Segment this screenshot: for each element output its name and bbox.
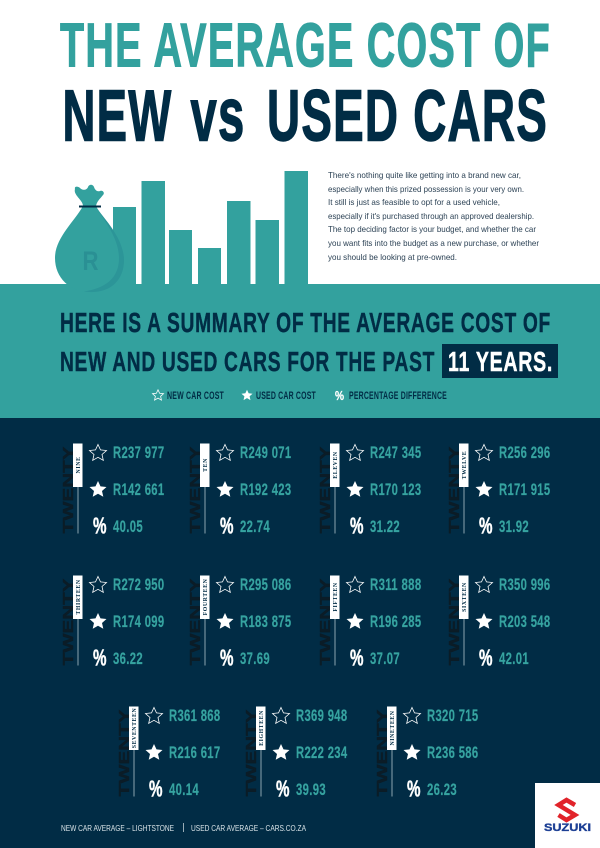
card: 2019: R320 715 (427, 707, 478, 725)
card: 2015: R311 888 (370, 576, 422, 594)
card: 2019: TWENTY (374, 710, 391, 796)
card: 2011 (317, 444, 422, 538)
legend: NEW CAR COST (167, 390, 224, 402)
card: 2018: % (276, 776, 290, 802)
card: 2012: R171 915 (499, 481, 550, 499)
card: 2016: SIXTEEN (462, 582, 468, 612)
logo: Suzuki (535, 783, 600, 848)
card: 2009: % (93, 512, 106, 538)
intro text: you want fits into the budget as a new purchase, or whether (328, 239, 539, 248)
summary heading: NEW AND USED CARS FOR THE PAST (60, 346, 435, 377)
card: 2019: NINETEEN (390, 710, 396, 746)
card: 2015: % (350, 644, 364, 670)
intro text: There's nothing quite like getting into a brand new car, (328, 171, 521, 180)
title: vs (190, 72, 246, 156)
card: 2012 (446, 444, 550, 538)
card: 2017: SEVENTEEN (132, 708, 138, 748)
card: 2018: EIGHTEEN (259, 710, 265, 746)
card: 2009: 40.05 (113, 518, 143, 536)
summary heading: 11 YEARS. (448, 346, 553, 377)
logo: Suzuki: SUZUKI (544, 822, 591, 834)
card: 2011: TWENTY (317, 446, 334, 534)
card: 2014: R295 086 (240, 576, 292, 594)
card: 2013: % (93, 644, 106, 670)
panel: teal band (0, 284, 600, 418)
card: 2013: 36.22 (113, 650, 143, 668)
summary heading (60, 307, 558, 378)
bar chart (113, 171, 308, 285)
card: 2016: 42.01 (499, 650, 529, 668)
card: 2019: R236 586 (427, 744, 478, 762)
card: 2015 (317, 576, 422, 670)
footer sources: NEW CAR AVERAGE – LIGHTSTONE (61, 823, 174, 833)
card: 2013: THIRTEEN (76, 579, 82, 615)
card: 2016: R350 996 (499, 576, 550, 594)
card: 2010: 22.74 (240, 518, 270, 536)
card: 2010: R249 071 (240, 444, 292, 462)
card: 2011: R247 345 (370, 444, 422, 462)
card: 2018: R369 948 (296, 707, 348, 725)
card: 2015: 37.07 (370, 650, 400, 668)
legend: PERCENTAGE DIFFERENCE (349, 390, 447, 402)
card: 2014 (187, 576, 292, 670)
card: 2011: 31.22 (370, 518, 400, 536)
card: 2017: TWENTY (116, 710, 133, 796)
legend: USED CAR COST (256, 390, 316, 402)
card: 2011: % (350, 512, 364, 538)
card: 2017: R361 868 (169, 707, 220, 725)
footer sources: USED CAR AVERAGE – CARS.CO.ZA (191, 823, 306, 833)
card: 2010 (187, 444, 292, 538)
card: 2016: % (479, 644, 492, 670)
card: 2012: R256 296 (499, 444, 550, 462)
card: 2010: TEN (203, 458, 209, 472)
card: 2019: % (407, 776, 420, 802)
card: 2010: TWENTY (187, 446, 204, 534)
intro text (328, 171, 539, 262)
card: 2011: ELEVEN (333, 451, 339, 479)
card: 2012: TWELVE (462, 451, 468, 479)
icon: money bag (55, 185, 124, 292)
card: 2017 (116, 706, 220, 802)
intro text: The top deciding factor is your budget, and whether the car (328, 225, 536, 234)
icon: money bag: R (82, 246, 98, 276)
legend (152, 388, 447, 403)
card: 2009: TWENTY (60, 446, 77, 534)
card: 2009: R237 977 (113, 444, 164, 462)
card: 2018: 39.93 (296, 781, 326, 799)
card: 2016 (446, 576, 550, 670)
title: NEW (62, 76, 172, 156)
legend: % (335, 388, 344, 403)
card: 2014: % (220, 644, 234, 670)
panel: navy data area (0, 418, 600, 848)
title (60, 12, 551, 156)
card: 2016: R203 548 (499, 613, 550, 631)
card: 2014: TWENTY (187, 578, 204, 666)
card: 2013: TWENTY (60, 578, 77, 666)
intro text: especially if it's purchased through an approved dealership. (328, 212, 534, 221)
card: 2014: FOURTEEN (203, 578, 209, 615)
card: 2009: NINE (76, 457, 82, 473)
intro text: you should be looking at pre-owned. (328, 253, 457, 262)
card: 2013 (60, 576, 164, 670)
card: 2016: TWENTY (446, 578, 463, 666)
card: 2017: % (149, 776, 162, 802)
card: 2013: R272 950 (113, 576, 164, 594)
card: 2014: R183 875 (240, 613, 292, 631)
card: 2018: TWENTY (243, 710, 260, 796)
card: 2015: FIFTEEN (333, 582, 339, 612)
card: 2018: R222 234 (296, 744, 348, 762)
card: 2011: R170 123 (370, 481, 422, 499)
card: 2015: TWENTY (317, 578, 334, 666)
card: 2009: R142 661 (113, 481, 164, 499)
card: 2009 (60, 444, 164, 538)
card: 2017: 40.14 (169, 781, 199, 799)
card: 2014: 37.69 (240, 650, 270, 668)
card: 2017: R216 617 (169, 744, 220, 762)
card: 2018 (243, 706, 348, 802)
card: 2013: R174 099 (113, 613, 164, 631)
card: 2012: TWENTY (446, 446, 463, 534)
card: 2010: R192 423 (240, 481, 292, 499)
card: 2012: % (479, 512, 492, 538)
card: 2019: 26.23 (427, 781, 457, 799)
card: 2012: 31.92 (499, 518, 529, 536)
intro text: It still is just as feasible to opt for a used vehicle, (328, 198, 500, 207)
footer sources (61, 823, 306, 833)
card: 2010: % (220, 512, 234, 538)
card: 2019 (374, 706, 478, 802)
intro text: especially when this prized possession is your very own. (328, 185, 524, 194)
card: 2015: R196 285 (370, 613, 422, 631)
